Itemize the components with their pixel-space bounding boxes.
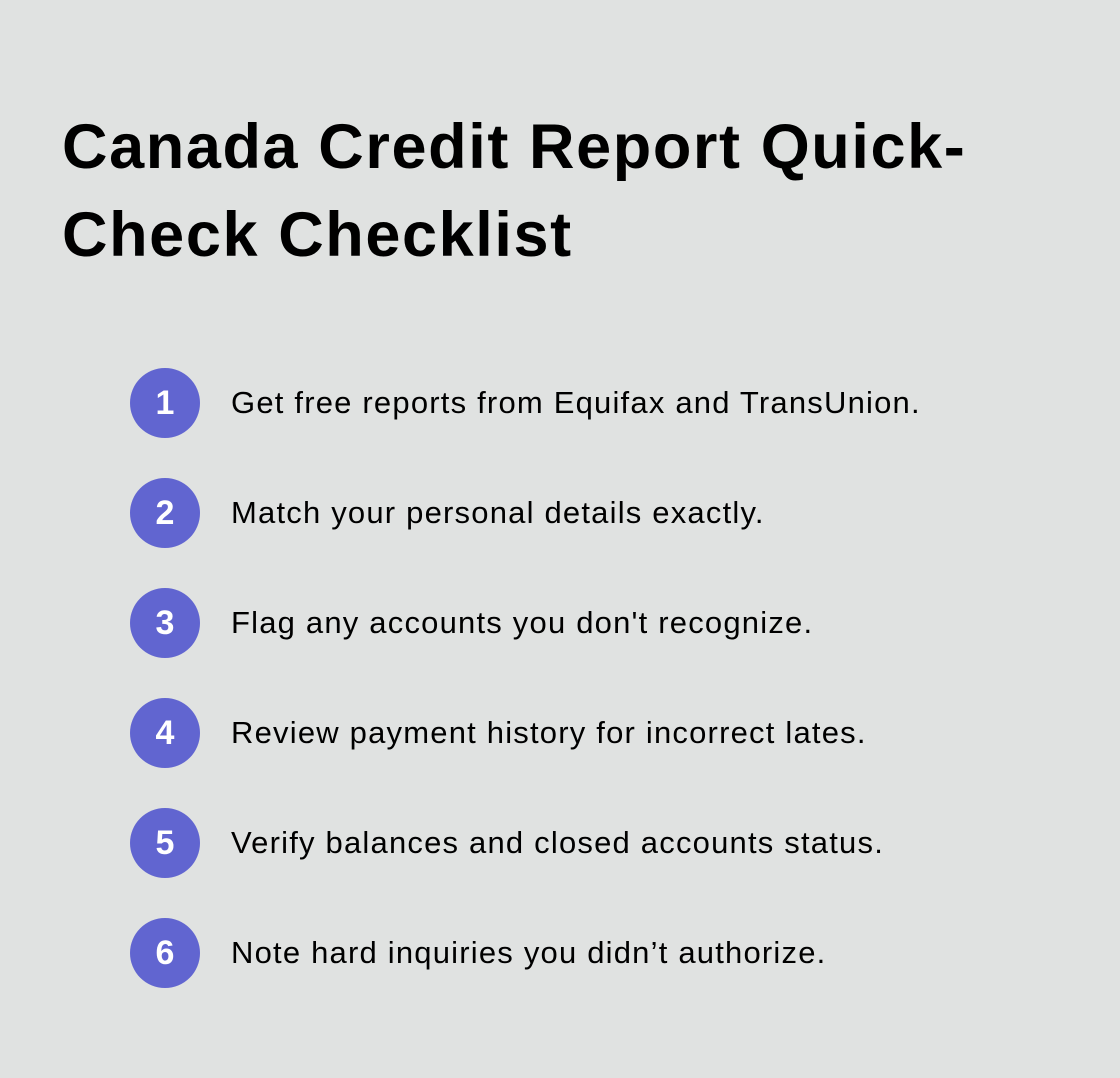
item 6 [130,918,826,988]
item 4: Review payment history for incorrect lates. [231,715,867,750]
item 3: Flag any accounts you don't recognize. [231,605,813,640]
item 5 [130,808,884,878]
title: Check Checklist [62,200,573,270]
item 5: 5 [156,824,174,862]
item 1: Get free reports from Equifax and TransUnion. [231,385,921,420]
title [62,112,966,270]
item 6: Note hard inquiries you didn’t authorize. [231,935,826,970]
item 6: 6 [156,934,174,972]
item 2: Match your personal details exactly. [231,495,765,530]
item 1 [130,368,921,438]
item 5: Verify balances and closed accounts status. [231,825,884,860]
item 4 [130,698,867,768]
item 4: 4 [156,714,174,752]
item 2 [130,478,765,548]
item 3: 3 [156,604,174,642]
item 2: 2 [156,494,174,532]
item 1: 1 [156,384,174,422]
title: Canada Credit Report Quick- [62,112,966,182]
item 3 [130,588,813,658]
